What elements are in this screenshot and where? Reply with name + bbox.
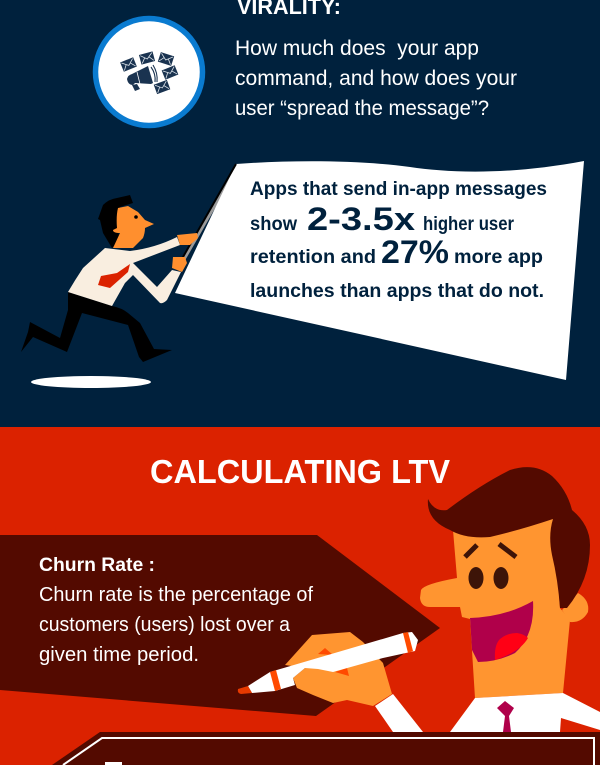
hand [285, 632, 392, 706]
shadow ellipse [31, 376, 151, 388]
eyes [468, 567, 484, 589]
ear [562, 593, 588, 622]
cut-off formula glyph [105, 762, 122, 765]
beam statistic text: more app [454, 247, 543, 268]
marker [238, 632, 418, 694]
beam statistic text: show [250, 214, 297, 235]
illustration: smiling man with marker [238, 467, 600, 732]
callout: churn rate: given time period. [39, 644, 199, 666]
panel: calculating LTV [0, 427, 600, 765]
callout: churn rate: Churn Rate : [39, 555, 155, 576]
legs [21, 292, 172, 362]
beam rod [181, 165, 238, 264]
beam statistic text: Apps that send in-app messages [250, 179, 547, 200]
marker cap accent [318, 648, 349, 676]
callout: churn rate: Churn rate is the percentage of [39, 584, 313, 606]
eye [134, 215, 138, 219]
heading: calculating LTV: CALCULATING LTV [150, 453, 450, 490]
light beam [175, 161, 584, 380]
panel: virality [0, 0, 600, 427]
hands [172, 233, 198, 272]
text block: virality question: command, and how does your [235, 67, 517, 90]
beam statistic text: launches than apps that do not. [250, 281, 544, 302]
beam statistic text [250, 179, 547, 302]
callout: churn rate: customers (users) lost over a [39, 614, 291, 636]
text block: virality question [235, 37, 517, 120]
icon: megaphone with envelopes [96, 18, 202, 126]
text block: virality question: user “spread the message”? [235, 97, 489, 120]
panel: bottom formula box [52, 732, 600, 765]
beam statistic text: retention and [250, 247, 376, 268]
illustration: running man [21, 195, 198, 388]
hair [428, 467, 590, 608]
mouth [470, 601, 533, 662]
callout: churn rate [0, 535, 440, 716]
text block: virality question: How much does your app [235, 37, 479, 60]
rod edge [179, 164, 236, 264]
tie [497, 701, 514, 732]
sleeve [375, 694, 423, 732]
beam statistic text: higher user [423, 214, 515, 235]
eyebrows [465, 544, 516, 557]
tie [98, 264, 130, 288]
shirt and arms [68, 237, 181, 306]
beam statistic text: 27% [381, 234, 449, 270]
shirt [450, 693, 600, 732]
tongue [495, 633, 528, 660]
face [113, 206, 154, 248]
neck and face [420, 515, 570, 698]
hair [98, 195, 133, 248]
beam statistic text: 2-3.5x [307, 201, 415, 237]
